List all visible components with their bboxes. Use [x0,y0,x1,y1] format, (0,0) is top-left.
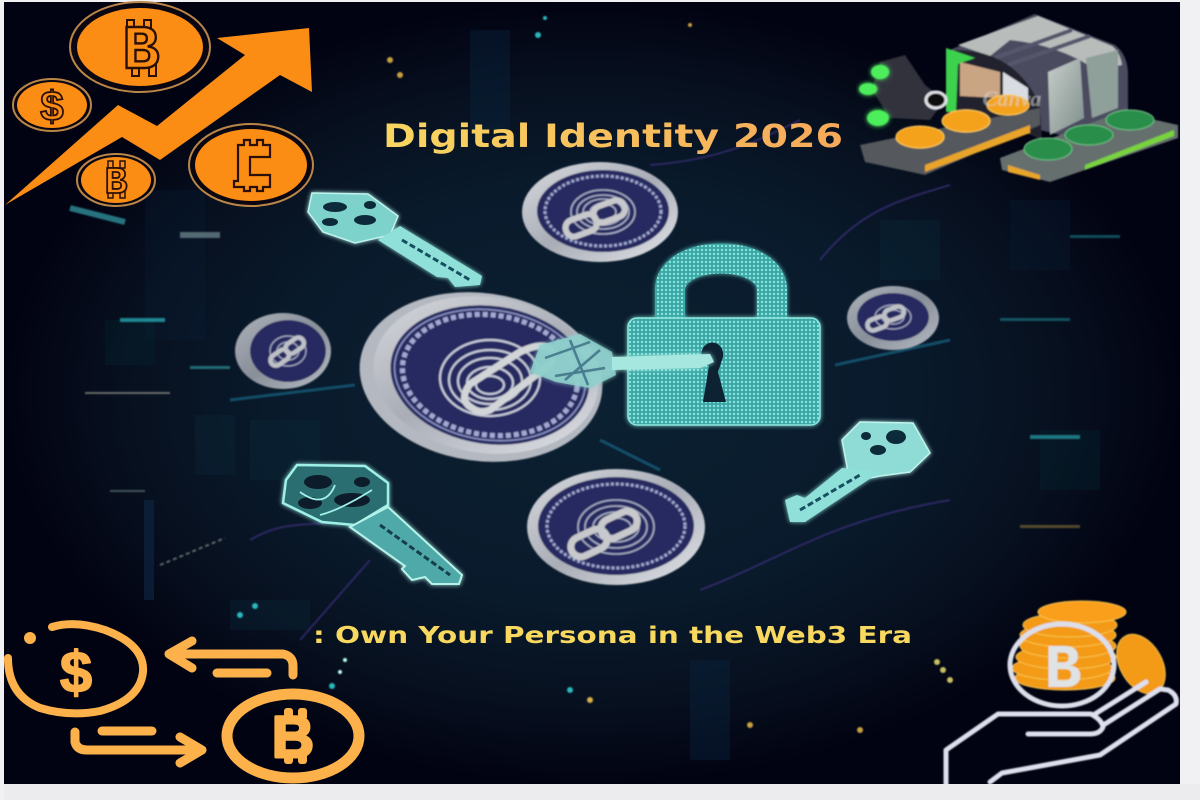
title: Digital Identity 2026 [383,117,843,155]
machine dark back [950,14,1128,135]
coins in hand icon [946,601,1176,784]
top-right coin machine [859,14,1178,182]
exchange icon group [8,624,359,778]
icon: dollar ring [8,624,143,713]
icon: top fingerprint coin [522,162,678,262]
machine top shell [958,16,1122,70]
icon: open hand [946,682,1176,784]
green conveyor base [1000,112,1178,182]
icon: rising arrow [5,28,312,205]
icon: dollar ring: $ [60,640,92,705]
bottom page shadow band [4,784,1200,800]
icon: bitcoin outline [1010,624,1114,706]
icon: bitcoin coin large [70,2,210,92]
watermark: Canva [983,86,1041,111]
icon: key top left [308,193,482,287]
orange conveyor base [860,108,1040,175]
arrow: to bitcoin [75,731,202,763]
tunnel opening [950,50,1042,140]
icon: bitcoin ring: B [272,705,314,770]
machine sides [1048,58,1084,135]
coins in hand icon: B [1044,635,1082,706]
arrow: to dollar [169,641,293,675]
icon: bitcoin coin large: B [122,16,160,87]
subtitle: : Own Your Persona in the Web3 Era [313,623,912,649]
orange coins [896,95,1029,148]
keyhole [701,343,726,402]
green coins [1024,110,1154,160]
icon: main fingerprint coin with key [348,277,714,477]
icon: small bitcoin coin [77,154,155,206]
icon: small bitcoin coin: B [105,162,127,205]
robot arm [872,55,945,120]
icon: dollar coin: $ [39,85,65,133]
icon: left small coin [235,313,331,389]
icon: key right [785,422,930,522]
icon: bottom fingerprint coin [527,469,705,585]
icon: padlock [628,258,820,425]
central key [530,334,714,388]
icon: key bottom left [283,465,462,584]
icon: right small coin [847,286,939,350]
icon: C coin [189,124,313,206]
top-left crypto growth graphic [5,2,313,206]
icon: coin stack [1012,601,1175,702]
icon: dollar coin [13,79,91,133]
icon: bitcoin ring [227,694,359,778]
